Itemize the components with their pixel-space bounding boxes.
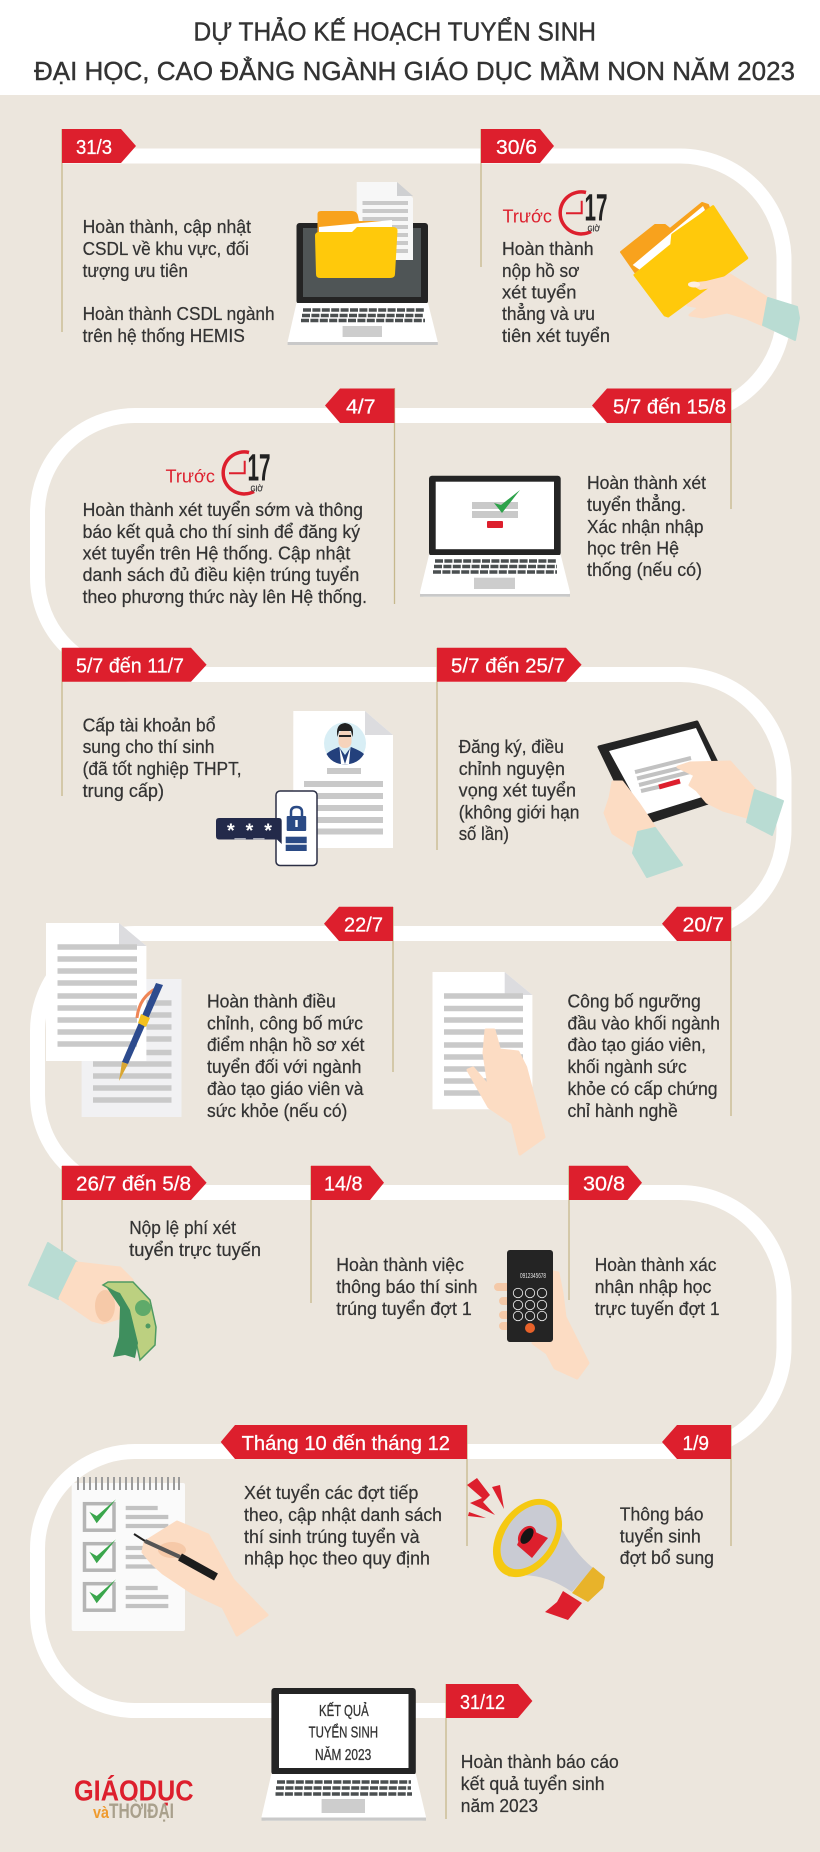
- text: 5/7 đến 25/7: vọng xét tuyển: [459, 781, 576, 801]
- date label: 30/8: [569, 1166, 642, 1200]
- icon: final laptop with result screen: NĂM 2023: [315, 1747, 371, 1764]
- text: 31/12: Hoàn thành báo cáo: [461, 1752, 619, 1772]
- date label: 4/7: [325, 388, 394, 423]
- text: 30/6: nộp hồ sơ: [502, 261, 580, 281]
- text: 20/7: Công bố ngưỡng: [568, 992, 701, 1012]
- winding white timeline road: [38, 156, 784, 1711]
- badge: trước 17 giờ (4/7): Trước: [166, 466, 215, 487]
- date label: 1/9: [662, 1425, 731, 1459]
- date label: 26/7 đến 5/8: 26/7 đến 5/8: [76, 1174, 191, 1196]
- text: 14/8: trúng tuyển đợt 1: [336, 1299, 472, 1319]
- text: 5/7 đến 15/8: Hoàn thành xét: [587, 473, 706, 493]
- text: 31/12: kết quả tuyển sinh: [461, 1774, 605, 1794]
- icon: document with pointing hand: [432, 972, 544, 1154]
- text: 1/9: đợt bổ sung: [620, 1548, 714, 1568]
- date label: 31/3: [62, 129, 136, 163]
- text: 26/7 đến 5/8: Nộp lệ phí xét: [129, 1218, 236, 1238]
- title: DỰ THẢO KẾ HOẠCH TUYỂN SINH: [194, 16, 596, 46]
- text: tháng 10 đến tháng 12: Xét tuyển các đợt tiếp: [244, 1483, 418, 1503]
- text: 22/7: đào tạo giáo viên và: [207, 1079, 364, 1099]
- text: 31/3: Hoàn thành CSDL ngành: [83, 304, 275, 324]
- logo: Giáo dục và Thời đại: và: [93, 1803, 109, 1822]
- text: 22/7: chỉnh, công bố mức: [207, 1014, 363, 1034]
- text: 1/9: Thông báo: [620, 1505, 704, 1525]
- text: 5/7 đến 11/7: sung cho thí sinh: [83, 737, 214, 757]
- text: 5/7 đến 15/8: [587, 473, 706, 580]
- icon: final laptop with result screen: [262, 1688, 426, 1821]
- date label: 22/7: [324, 907, 393, 941]
- date label: Tháng 10 đến tháng 12: Tháng 10 đến tháng 12: [242, 1433, 450, 1455]
- date label: 4/7: 4/7: [346, 396, 376, 418]
- date label: Tháng 10 đến tháng 12: [221, 1425, 467, 1459]
- date label: 31/12: 31/12: [460, 1692, 505, 1714]
- text: 22/7: tuyển đối với ngành: [207, 1057, 361, 1077]
- date label: 22/7: 22/7: [344, 915, 383, 937]
- icon: megaphone: [467, 1478, 605, 1620]
- badge: trước 17 giờ (30/6): 17: [584, 188, 608, 230]
- text: 4/7: theo phương thức này lên Hệ thống.: [83, 587, 367, 607]
- icon: hand holding phone: 0912345678: [520, 1273, 546, 1280]
- icon: laptop with folder and document: [288, 182, 438, 345]
- text: 31/3: tượng ưu tiên: [83, 261, 188, 281]
- icon: profile document with password phone: *_*_*: [227, 821, 273, 842]
- text: 4/7: danh sách đủ điều kiện trúng tuyển: [83, 565, 359, 585]
- icon: hand holding folder: [621, 203, 799, 340]
- text: 5/7 đến 25/7: [459, 737, 580, 844]
- icon: documents and pen: [46, 923, 182, 1117]
- icon: hands on tablet: [599, 722, 783, 877]
- text: 31/3: Hoàn thành, cập nhật: [83, 217, 251, 237]
- text: 5/7 đến 11/7: (đã tốt nghiệp THPT,: [83, 759, 242, 779]
- text: 5/7 đến 25/7: (không giới hạn: [459, 802, 580, 822]
- text: 30/6: thẳng và ưu: [502, 303, 595, 324]
- date label: 20/7: [662, 907, 731, 941]
- text: 22/7: điểm nhận hồ sơ xét: [207, 1035, 364, 1055]
- text: 5/7 đến 15/8: thống (nếu có): [587, 560, 702, 580]
- text: tháng 10 đến tháng 12: thí sinh trúng tuyển và: [244, 1527, 420, 1547]
- text: 31/12: năm 2023: [461, 1796, 538, 1816]
- logo: Giáo dục và Thời đại: GIÁODỤC: [74, 1774, 194, 1808]
- text: 22/7: sức khỏe (nếu có): [207, 1101, 347, 1121]
- date label: 26/7 đến 5/8: [62, 1166, 207, 1200]
- text: 30/8: trực tuyến đợt 1: [595, 1299, 720, 1319]
- date label: 5/7 đến 11/7: 5/7 đến 11/7: [76, 656, 184, 678]
- title: [34, 16, 795, 86]
- icon: laptop with green check: [420, 476, 570, 597]
- text: 5/7 đến 15/8: học trên Hệ: [587, 539, 679, 559]
- date label: 5/7 đến 15/8: 5/7 đến 15/8: [613, 396, 726, 418]
- text: 20/7: khối ngành sức: [568, 1057, 687, 1077]
- text: 14/8: Hoàn thành việc: [336, 1255, 464, 1275]
- text: 5/7 đến 15/8: tuyển thẳng.: [587, 494, 686, 515]
- date label: 14/8: 14/8: [324, 1174, 362, 1196]
- text: 5/7 đến 11/7: trung cấp): [83, 781, 164, 801]
- text: 5/7 đến 11/7: [83, 716, 242, 801]
- badge: trước 17 giờ (30/6): Trước: [502, 206, 552, 227]
- text: 5/7 đến 25/7: Đăng ký, điều: [459, 737, 564, 757]
- text: tháng 10 đến tháng 12: nhập học theo quy định: [244, 1548, 430, 1568]
- text: 22/7: [207, 992, 364, 1121]
- text: 30/6: tiên xét tuyển: [502, 326, 610, 346]
- text: 1/9: [620, 1505, 714, 1568]
- text: 5/7 đến 25/7: số lần): [459, 824, 509, 844]
- badge: trước 17 giờ (30/6): [502, 188, 608, 234]
- text: tháng 10 đến tháng 12: theo, cập nhật danh sách: [244, 1505, 442, 1525]
- text: 5/7 đến 25/7: chỉnh nguyện: [459, 759, 565, 779]
- text: 22/7: Hoàn thành điều: [207, 992, 336, 1012]
- text: 31/3: trên hệ thống HEMIS: [83, 326, 245, 346]
- badge: trước 17 giờ (4/7): 17: [248, 448, 270, 490]
- text: 30/8: Hoàn thành xác: [595, 1255, 716, 1275]
- icon: checklist with writing hand: [72, 1477, 267, 1635]
- text: 4/7: Hoàn thành xét tuyển sớm và thông: [83, 500, 363, 520]
- text: 20/7: đầu vào khối ngành: [568, 1014, 720, 1034]
- text: 4/7: báo kết quả cho thí sinh để đăng ký: [83, 522, 360, 542]
- text: 30/6: Hoàn thành: [502, 239, 594, 259]
- text: 20/7: chỉ hành nghề: [568, 1101, 678, 1121]
- text: 31/3: CSDL về khu vực, đối: [83, 239, 249, 259]
- text: 14/8: thông báo thí sinh: [336, 1277, 478, 1297]
- date label: 5/7 đến 11/7: [62, 648, 207, 682]
- date label: 30/8: 30/8: [583, 1174, 625, 1196]
- vertical marker lines: [62, 129, 731, 1819]
- text: 26/7 đến 5/8: [129, 1218, 261, 1260]
- title: ĐẠI HỌC, CAO ĐẲNG NGÀNH GIÁO DỤC MẦM NON NĂM 2023: [34, 56, 795, 86]
- text: 30/8: nhận nhập học: [595, 1277, 711, 1297]
- date label: 30/6: [481, 129, 554, 163]
- text: 5/7 đến 15/8: Xác nhận nhập: [587, 517, 704, 537]
- text: 30/6: xét tuyển: [502, 282, 576, 302]
- logo: Giáo dục và Thời đại: THỜIĐẠI: [109, 1799, 174, 1823]
- icon: profile document with password phone: [216, 711, 393, 866]
- text: 26/7 đến 5/8: tuyển trực tuyến: [129, 1240, 261, 1260]
- date label: 5/7 đến 15/8: [592, 388, 731, 423]
- icon: hand with money: [29, 1243, 156, 1360]
- date label: 30/6: 30/6: [496, 137, 537, 159]
- text: 31/3: [83, 217, 275, 346]
- text: 20/7: khỏe có cấp chứng: [568, 1079, 718, 1099]
- badge: trước 17 giờ (30/6): GIỜ: [588, 222, 601, 234]
- text: 4/7: [83, 500, 367, 607]
- text: 1/9: tuyển sinh: [620, 1526, 701, 1546]
- icon: final laptop with result screen: TUYỂN SINH: [309, 1724, 378, 1742]
- icon: final laptop with result screen: KẾT QUẢ: [319, 1703, 369, 1720]
- text: tháng 10 đến tháng 12: [244, 1483, 442, 1568]
- date label: 5/7 đến 25/7: [437, 648, 582, 682]
- date label: 31/3: 31/3: [76, 137, 112, 159]
- badge: trước 17 giờ (4/7): GIỜ: [250, 482, 264, 494]
- date label: 20/7: 20/7: [682, 915, 724, 937]
- text: 30/8: [595, 1255, 720, 1319]
- text: 14/8: [336, 1255, 478, 1319]
- text: 30/6: [502, 239, 610, 346]
- text: 4/7: xét tuyển trên Hệ thống. Cập nhật: [83, 544, 350, 564]
- date label: 1/9: 1/9: [682, 1433, 709, 1455]
- text: 20/7: đào tạo giáo viên,: [568, 1035, 706, 1055]
- date label: 5/7 đến 25/7: 5/7 đến 25/7: [451, 656, 565, 678]
- icon: hand holding phone: [498, 1250, 588, 1378]
- text: 5/7 đến 11/7: Cấp tài khoản bổ: [83, 716, 215, 736]
- date label: 14/8: [311, 1166, 384, 1200]
- logo: Giáo dục và Thời đại: [74, 1774, 194, 1823]
- date label: 31/12: [446, 1684, 532, 1718]
- text: 31/12: [461, 1752, 619, 1816]
- text: 20/7: [568, 992, 720, 1121]
- badge: trước 17 giờ (4/7): [166, 448, 270, 494]
